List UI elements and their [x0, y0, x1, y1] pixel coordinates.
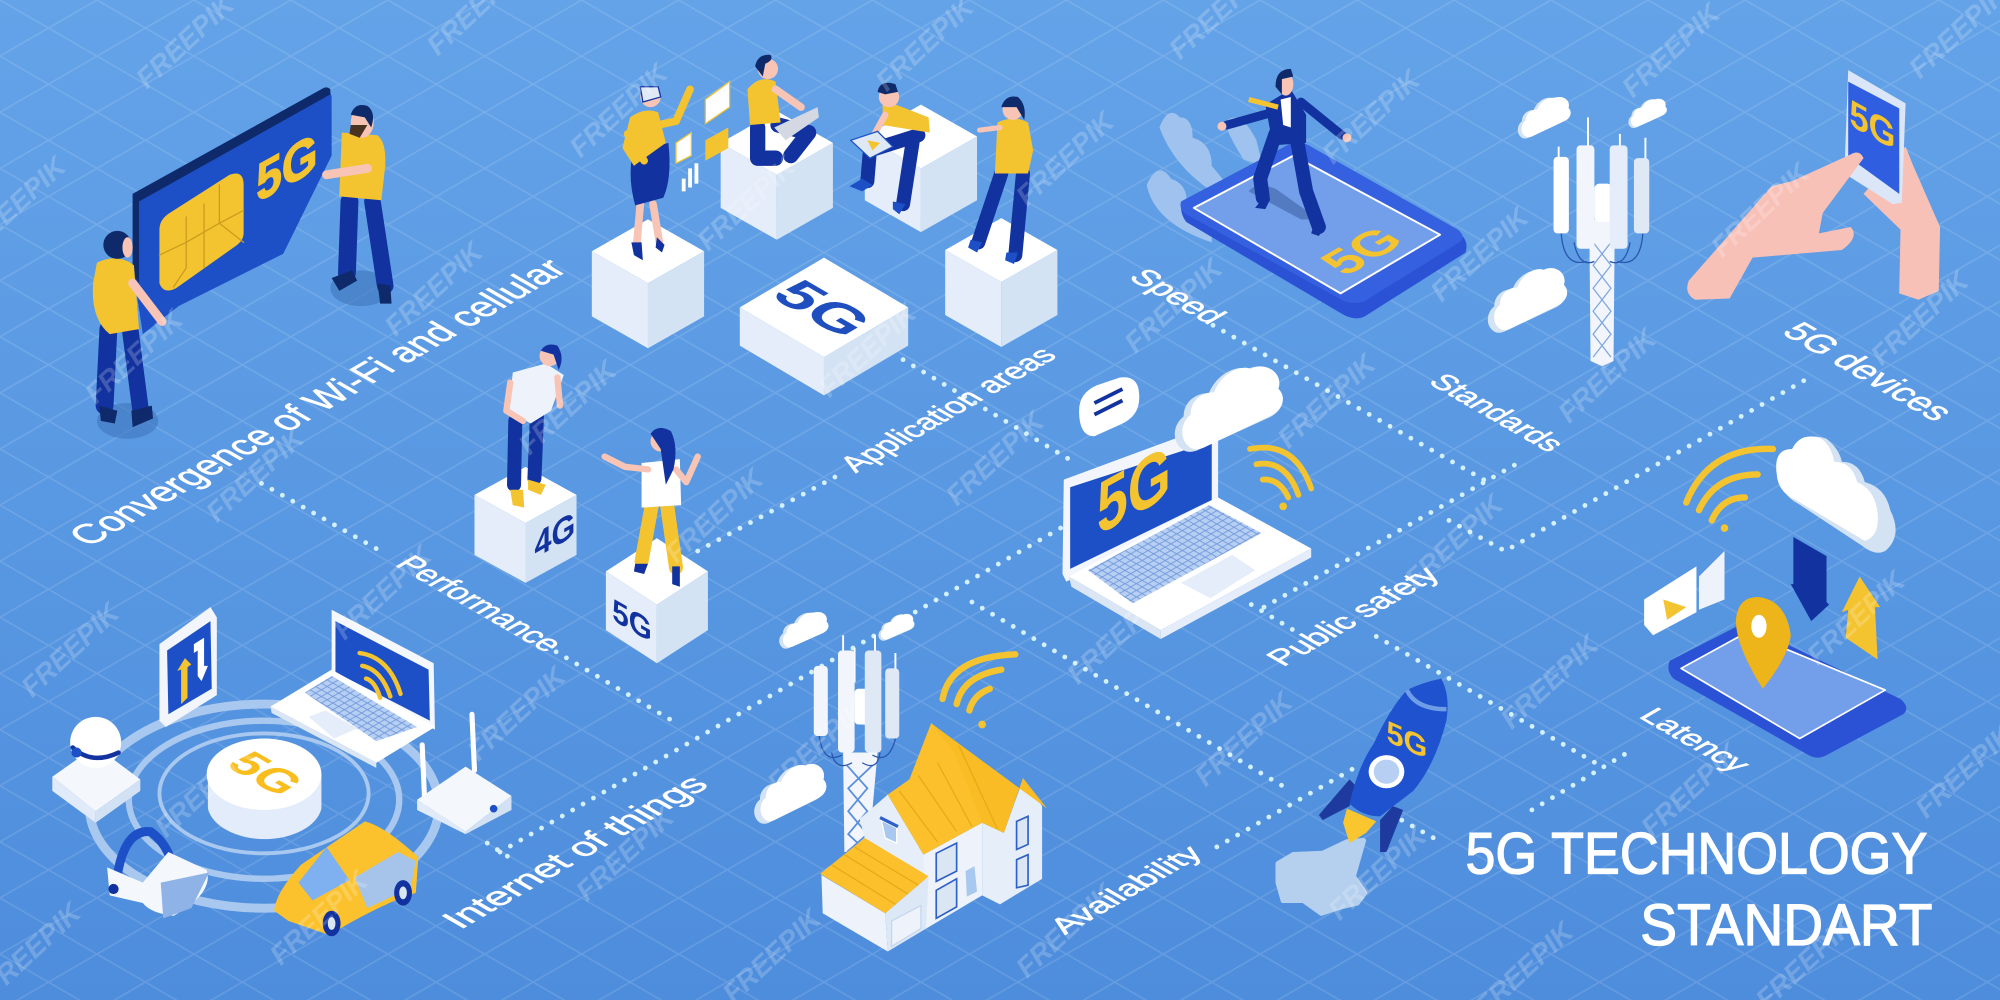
woman with VR headset [622, 87, 690, 260]
watermark: FREEPIK [1616, 0, 1727, 103]
router [417, 714, 511, 834]
watermark: FREEPIK [563, 56, 675, 163]
label: performance: Performance [388, 551, 572, 657]
rocket body [1349, 679, 1448, 816]
watermark: FREEPIK [1865, 264, 1976, 371]
watermark: FREEPIK [1322, 819, 1434, 926]
watermark: FREEPIK [691, 150, 802, 256]
cube C [865, 105, 977, 232]
panel: hands with phone [1687, 70, 1940, 300]
surf phone [1180, 142, 1467, 318]
watermark: FREEPIK [461, 660, 573, 767]
label: latency: Latency [1632, 703, 1759, 777]
label: speed: Speed [1121, 264, 1234, 329]
5G cube small [606, 538, 708, 663]
watermark: FREEPIK [812, 296, 924, 403]
panel: IoT ring scene [52, 607, 511, 936]
panel: latency phone [1644, 436, 1906, 758]
panel: rocket [1278, 679, 1448, 913]
man with tablet [849, 83, 930, 214]
panel: central laptop [1062, 366, 1311, 639]
watermark: FREEPIK [79, 303, 190, 409]
rocket window [1369, 755, 1404, 788]
SIM 5G label: 5G [256, 121, 318, 215]
house walls [860, 779, 1042, 929]
woman with raised hands [605, 428, 698, 587]
floating panels [676, 82, 730, 191]
watermark: FREEPIK [1061, 583, 1172, 690]
5G cylinder: 5G [216, 744, 316, 802]
watermark: FREEPIK [1552, 322, 1663, 428]
4G cube: 4G [534, 504, 575, 567]
woman standing [968, 97, 1033, 264]
cloud [1776, 436, 1896, 553]
watermark: FREEPIK [570, 800, 681, 907]
man on phone [506, 345, 564, 508]
nose band [1407, 690, 1446, 709]
5G cube small: 5G [612, 592, 652, 650]
cube B [721, 111, 833, 240]
title: 5G TECHNOLOGY [1466, 822, 1927, 887]
watermark: FREEPIK [512, 354, 624, 460]
phone [1844, 70, 1906, 204]
laptop screen: 5G [1097, 428, 1171, 552]
panel: application area cubes and people [592, 55, 1057, 395]
panel: SIM card with two people [93, 87, 392, 439]
man with laptop [747, 55, 819, 158]
cube A [592, 219, 704, 348]
label: application areas: Application areas [831, 342, 1064, 477]
watermark: FREEPIK [1118, 252, 1230, 358]
label: internet of things: Internet of things [433, 770, 717, 934]
surf phone: 5G [1308, 220, 1416, 282]
VR headset [107, 831, 209, 918]
watermark: FREEPIK [1399, 488, 1510, 594]
car [274, 821, 418, 936]
location pin [1736, 597, 1791, 689]
latency phone body [1668, 625, 1906, 758]
cloud on laptop [1175, 366, 1283, 452]
watermark: FREEPIK [1010, 877, 1121, 983]
tablet [159, 607, 217, 727]
surf clouds [1147, 113, 1263, 242]
house roof [888, 723, 1047, 855]
watermark: FREEPIK [15, 596, 126, 703]
watermark: FREEPIK [1705, 156, 1816, 263]
panel: 4G to 5G cubes [474, 345, 708, 663]
laptop base [1069, 497, 1311, 639]
smoke [1278, 841, 1365, 913]
watermark: FREEPIK [659, 462, 770, 569]
antennas [1554, 117, 1649, 263]
rocket 5G: 5G [1386, 713, 1427, 766]
5G cylinder [207, 739, 321, 839]
house [820, 723, 1047, 952]
person right [327, 105, 392, 304]
watermark: FREEPIK [940, 405, 1051, 511]
watermark: FREEPIK [379, 235, 490, 342]
surfer man [1217, 69, 1351, 236]
watermark: FREEPIK [761, 692, 873, 798]
person left [93, 231, 162, 427]
left hand [1687, 152, 1864, 300]
label: availability: Availability [1042, 841, 1211, 938]
watermark: FREEPIK [1635, 736, 1746, 843]
lattice [1589, 219, 1615, 366]
video icon [1644, 551, 1724, 635]
phone: 5G [1849, 91, 1895, 159]
panel: antenna tower with clouds [1488, 97, 1667, 366]
watermark: FREEPIK [1316, 63, 1427, 170]
watermark: FREEPIK [1424, 201, 1536, 307]
fins and flame [1319, 779, 1403, 852]
watermark: FREEPIK [1010, 105, 1121, 212]
panel: phone with surfer [1147, 69, 1467, 318]
tower [814, 635, 899, 852]
title [1466, 822, 1932, 958]
watermark: FREEPIK [1801, 564, 1912, 671]
right hand [1864, 147, 1940, 300]
label: convergence: Convergence of Wi-Fi and cellular [59, 253, 576, 552]
watermark: FREEPIK [264, 864, 375, 971]
panel: tower and house [754, 612, 1047, 952]
label: standards: Standards [1421, 369, 1572, 456]
wifi laptop [1250, 448, 1311, 510]
rings [89, 704, 439, 908]
5G block: 5G [759, 272, 885, 345]
SIM card [133, 87, 332, 334]
4G cube [474, 467, 577, 583]
clouds [1488, 97, 1667, 333]
watermark: FREEPIK [1188, 685, 1300, 792]
wifi above house [943, 654, 1015, 728]
label: 5G devices: 5G devices [1774, 317, 1963, 426]
down arrow [1791, 537, 1829, 621]
clouds near tower [754, 612, 914, 824]
title: STANDART [1640, 893, 1932, 958]
garage [820, 838, 929, 952]
label: public safety: Public safety [1258, 561, 1447, 671]
dotted connector lines [261, 325, 1805, 860]
wifi [1686, 449, 1773, 532]
cube D [945, 218, 1057, 347]
5G block [740, 258, 908, 395]
speech bubble [1079, 377, 1139, 436]
up arrow [1842, 577, 1880, 659]
SIM chip [159, 173, 244, 291]
small laptop [270, 610, 435, 768]
watermark: FREEPIK [149, 736, 260, 843]
watermark: FREEPIK [328, 539, 439, 645]
laptop screen [1062, 426, 1218, 582]
camera robot [52, 717, 140, 823]
watermark: FREEPIK [1495, 628, 1606, 735]
watermark: FREEPIK [1271, 347, 1383, 454]
watermark: FREEPIK [200, 421, 311, 528]
